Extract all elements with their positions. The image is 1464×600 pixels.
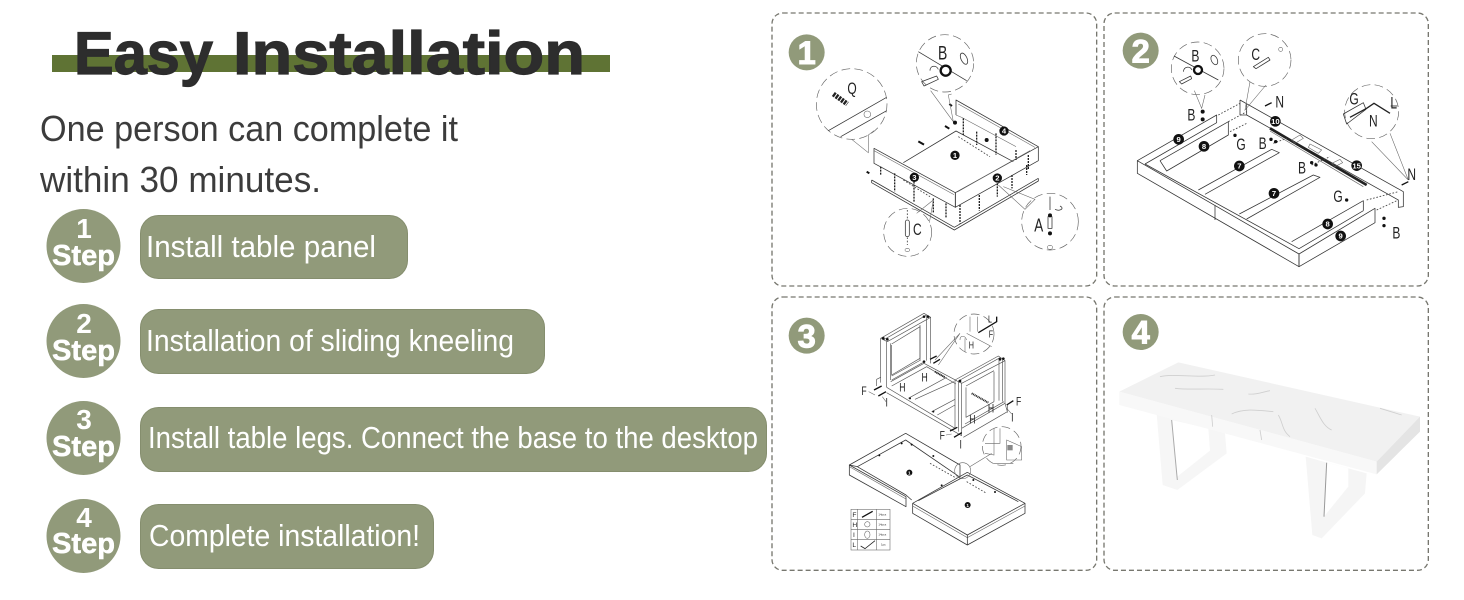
badge 3 <box>789 317 825 354</box>
letters: H <box>922 372 928 385</box>
marker 7 lower <box>1269 188 1279 199</box>
letters: I <box>885 397 888 410</box>
detail connector <box>982 427 1022 465</box>
step 2 badge <box>46 304 120 378</box>
step 3 badge: Step <box>52 431 115 463</box>
intro text: One person can complete it <box>40 108 458 149</box>
markers: 1 <box>908 471 911 476</box>
marker 10 <box>1270 116 1281 127</box>
detail A <box>1022 193 1078 250</box>
detail C <box>1238 34 1291 86</box>
marker 2 <box>993 173 1002 183</box>
marker 15 <box>1351 160 1362 171</box>
letters <box>861 372 1021 452</box>
marker 7 upper <box>1234 161 1245 171</box>
letters: B <box>1259 135 1267 154</box>
marker 10: 10 <box>1271 117 1280 126</box>
letters: H <box>969 414 975 427</box>
detail circle L F H: L <box>988 313 992 325</box>
marker 7 upper: 7 <box>1237 162 1241 171</box>
marker 7 lower: 7 <box>1272 189 1276 198</box>
step 4 badge: Step <box>52 528 115 560</box>
parts table: 14pcs <box>878 513 887 517</box>
detail G N L: G <box>1349 91 1359 109</box>
marker 8 upper <box>1199 141 1209 152</box>
detail G N L: L <box>1390 95 1397 113</box>
detail G N L: N <box>1369 113 1378 131</box>
detail Q: Q <box>847 80 857 99</box>
parts table: 14pcs <box>878 533 887 537</box>
step 3 row <box>46 401 766 475</box>
letters: F <box>861 386 867 398</box>
near leg <box>1306 457 1367 538</box>
step 3 badge <box>46 401 120 475</box>
parts table: L <box>852 542 856 549</box>
step 2 badge: 2 <box>76 308 92 339</box>
letters: F <box>1016 396 1021 409</box>
panel 1 assembly drawing <box>852 91 1038 230</box>
far leg <box>1157 414 1227 490</box>
step 4 badge <box>46 499 120 573</box>
step 4 row <box>46 499 434 573</box>
table illustration <box>1119 362 1420 538</box>
detail A: A <box>1034 215 1043 236</box>
step 4 label: Complete installation! <box>149 518 420 553</box>
detail B <box>916 35 974 92</box>
numbered markers <box>950 151 960 160</box>
panel 1: install table panel diagram <box>772 13 1097 286</box>
numbered markers: 1 <box>953 151 958 160</box>
intro text <box>39 108 458 200</box>
badge 4: 4 <box>1132 314 1150 351</box>
parts table <box>851 509 890 550</box>
markers <box>906 470 971 508</box>
letters: G <box>1333 188 1343 207</box>
letters: B <box>1392 225 1400 243</box>
letters: N <box>1275 94 1284 112</box>
detail B: B <box>938 42 947 64</box>
detail B: B <box>1191 48 1199 66</box>
marker 4 <box>999 126 1009 136</box>
title: Easy Installation: Easy <box>74 20 214 87</box>
step 3 badge: 3 <box>76 404 92 435</box>
step 4 label <box>140 504 434 568</box>
step 1 row <box>46 209 408 283</box>
detail B <box>1171 42 1224 95</box>
step 2 badge: Step <box>52 335 115 367</box>
letters: B <box>1187 107 1195 125</box>
lower table panels <box>849 433 1025 545</box>
step 1 label <box>140 216 408 278</box>
step 1 badge: 1 <box>76 213 92 244</box>
parts table: 14pcs <box>878 523 887 527</box>
title: Easy Installation: Installation <box>233 20 585 87</box>
badge 4 <box>1123 314 1159 351</box>
intro text: within 30 minutes. <box>39 159 321 200</box>
step 3 label <box>140 408 766 472</box>
marker 3 <box>910 173 919 182</box>
marker 9 lower: 9 <box>1339 232 1343 241</box>
detail circle L F H: F <box>989 328 993 340</box>
detail C <box>884 208 932 256</box>
letters: H <box>899 382 905 395</box>
panel 3: table legs diagram <box>772 297 1097 570</box>
marker 15: 15 <box>1352 161 1362 170</box>
letters: B <box>1298 160 1306 178</box>
marker 8 upper: 8 <box>1202 142 1207 151</box>
marker 8 lower: 8 <box>1326 220 1331 229</box>
marker 9 lower <box>1335 231 1346 241</box>
step 3 label: Install table legs. Connect the base to the desktop <box>148 420 758 455</box>
detail Q <box>816 69 887 139</box>
step 2 label <box>140 310 544 374</box>
letters: F <box>940 430 945 443</box>
panel 2: sliding rails diagram <box>1104 13 1428 286</box>
parts table: I <box>853 532 855 539</box>
numbered markers <box>1173 134 1184 145</box>
marker 8 lower <box>1322 219 1333 229</box>
step 2 row <box>46 304 544 378</box>
letters: G <box>1236 136 1246 155</box>
parts table: F <box>852 512 856 519</box>
parts table: H <box>852 522 857 529</box>
detail G N L <box>1343 85 1399 139</box>
markers: 1 <box>966 503 969 508</box>
badge 2 <box>1123 32 1159 69</box>
panel 4: finished table <box>1104 297 1428 570</box>
marker 3: 3 <box>912 173 916 182</box>
badge 3: 3 <box>798 317 816 354</box>
step 1 badge: Step <box>52 240 115 272</box>
parts table: 1pc <box>881 543 886 547</box>
badge 1 <box>789 34 825 71</box>
badge 2: 2 <box>1132 32 1150 69</box>
letters <box>1187 94 1416 243</box>
table top <box>1119 362 1420 462</box>
detail circle L F H <box>935 313 997 365</box>
step 1 badge <box>46 209 120 283</box>
panel 2 frame drawing <box>1137 82 1416 267</box>
detail C: C <box>1251 46 1260 65</box>
marker 2: 2 <box>995 174 999 183</box>
step 2 label: Installation of sliding kneeling <box>146 323 514 358</box>
step 1 label: Install table panel <box>146 229 376 264</box>
title: Easy Installation <box>52 20 610 87</box>
letters: I <box>1011 412 1014 425</box>
upper base and legs <box>861 313 1021 452</box>
marker 4: 4 <box>1002 127 1007 136</box>
detail circle L F H: H <box>969 339 974 351</box>
detail C: C <box>913 221 922 240</box>
numbered markers: 9 <box>1177 135 1181 144</box>
letters: I <box>959 439 962 452</box>
letters: N <box>1407 166 1416 185</box>
letters: H <box>988 403 994 416</box>
step 4 badge: 4 <box>76 502 92 533</box>
badge 1: 1 <box>798 34 816 71</box>
